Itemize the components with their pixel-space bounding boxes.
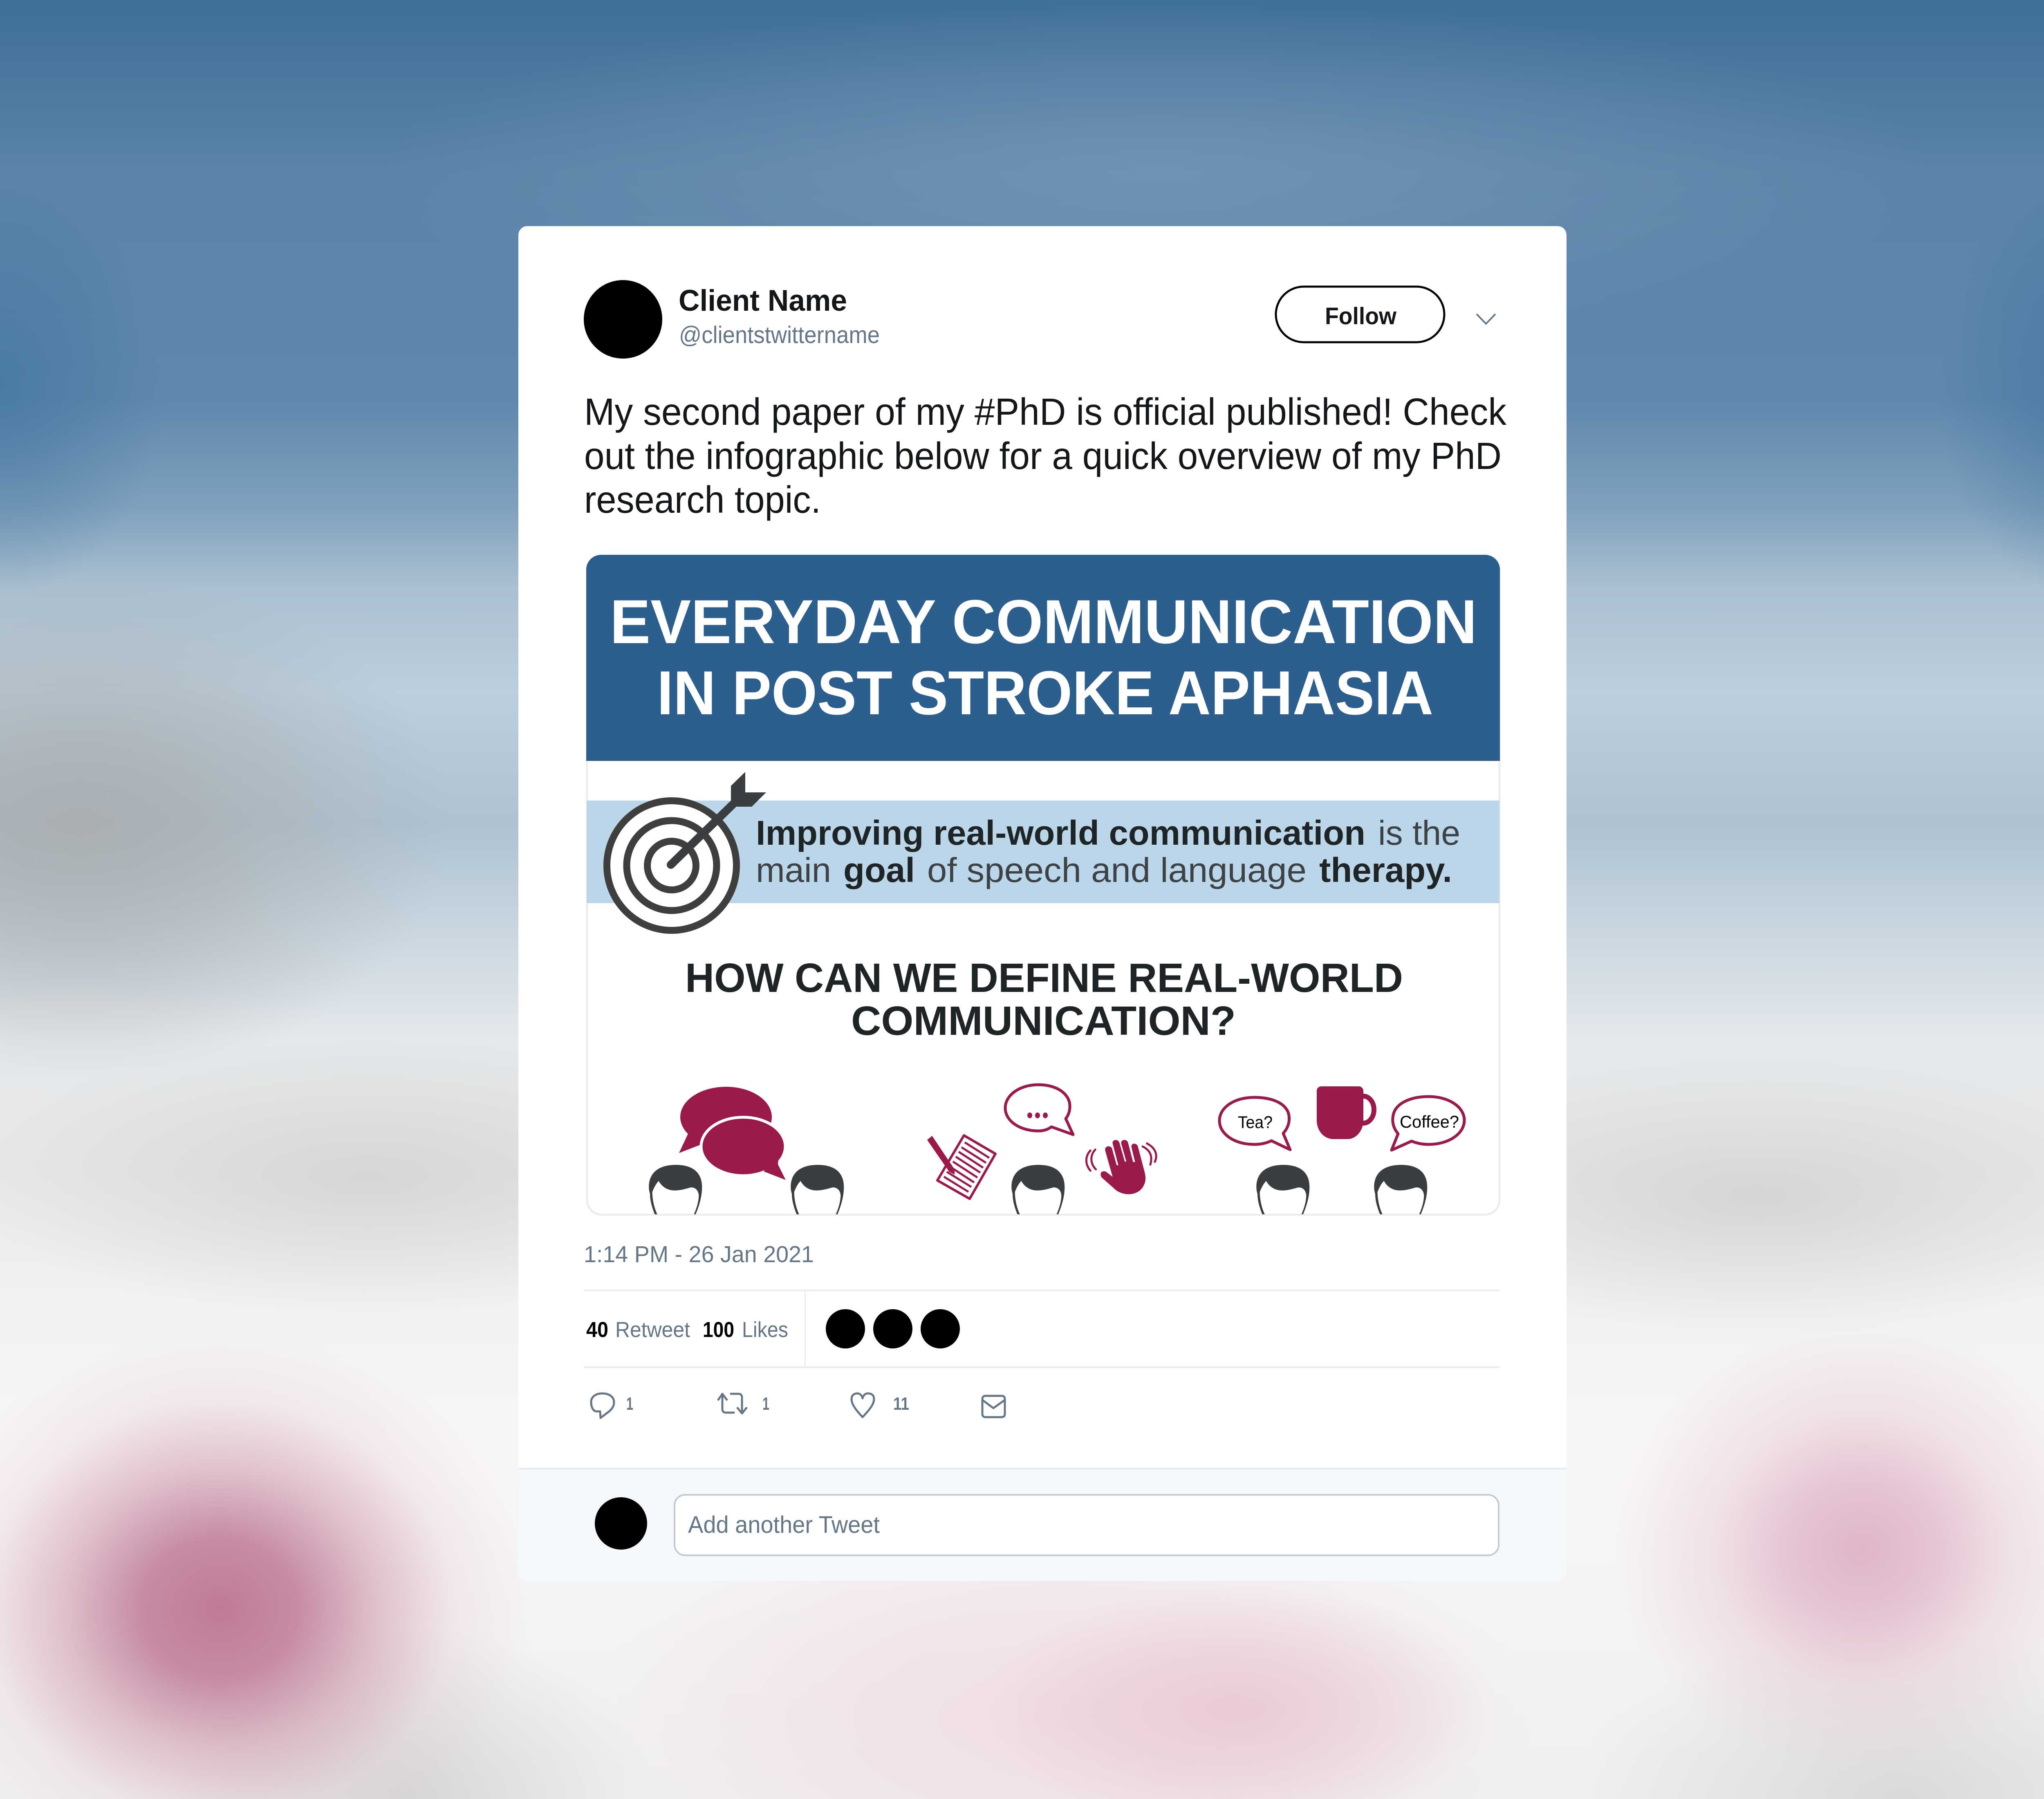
title banner: [586, 555, 1500, 761]
goal band: therapy.: [1319, 851, 1452, 889]
follow button: Follow: [1325, 303, 1397, 330]
panel: infographic image: [586, 555, 1500, 1215]
twitter handle: @clientstwittername: [679, 322, 880, 348]
icon: reply: [591, 1393, 614, 1418]
action counts: 11: [893, 1394, 909, 1414]
icon: dropdown chevron: [1477, 314, 1495, 324]
icon: overlapping speech bubbles: [679, 1087, 786, 1180]
icon: people heads: [649, 1165, 1427, 1214]
tweet text: My second paper of my #PhD is official published! Check: [584, 390, 1506, 433]
heading: COMMUNICATION?: [851, 998, 1236, 1044]
footer avatar: [595, 1497, 647, 1550]
icon: coffee speech bubble: Coffee?: [1400, 1112, 1459, 1131]
tweet text: research topic.: [584, 478, 821, 521]
goal band: goal: [843, 851, 915, 889]
action counts: 1: [626, 1394, 633, 1414]
title banner: IN POST STROKE APHASIA: [657, 658, 1433, 728]
goal band: [587, 801, 1499, 903]
stats row: 100: [703, 1318, 734, 1342]
goal band: main: [756, 851, 831, 889]
icon: tea speech bubble: [1219, 1097, 1290, 1150]
action icons: [591, 1393, 1005, 1418]
icon: notepad and pen: [927, 1135, 995, 1199]
goal band: is the: [1378, 814, 1460, 852]
icon: target with arrow: [607, 772, 766, 931]
icon: message: [982, 1396, 1005, 1417]
client name: Client Name: [679, 284, 847, 317]
title banner: EVERYDAY COMMUNICATION: [610, 587, 1477, 657]
timestamp: 1:14 PM - 26 Jan 2021: [584, 1241, 814, 1267]
heading: HOW CAN WE DEFINE REAL-WORLD: [685, 955, 1403, 1001]
stats row: [584, 1290, 1499, 1368]
icon: tea speech bubble: Tea?: [1238, 1113, 1273, 1132]
stats row: Retweet: [615, 1318, 690, 1342]
avatar: [584, 280, 662, 359]
heading: [685, 955, 1403, 1044]
tweet text: out the infographic below for a quick overview of my PhD: [584, 435, 1502, 477]
action counts: 1: [762, 1394, 769, 1414]
reply footer: [518, 1468, 1567, 1581]
add another tweet input: [675, 1495, 1499, 1555]
icon: waving hand: [1086, 1140, 1156, 1194]
icon: like: [852, 1393, 874, 1417]
add another tweet input: Add another Tweet: [688, 1512, 880, 1538]
follow button: [1276, 287, 1444, 342]
action counts: [626, 1394, 909, 1414]
goal band: Improving real-world communication: [756, 814, 1365, 852]
panel: tweet card: [518, 226, 1567, 1581]
icon: coffee speech bubble: [1392, 1097, 1464, 1150]
icon: ellipsis speech bubble: [1005, 1085, 1073, 1135]
icon: retweet: [718, 1394, 747, 1413]
stats row: 40: [586, 1318, 608, 1342]
goal band: of speech and language: [927, 851, 1307, 889]
tweet text: [584, 390, 1506, 521]
stats row: Likes: [742, 1318, 788, 1342]
icon: mug: [1317, 1086, 1374, 1139]
